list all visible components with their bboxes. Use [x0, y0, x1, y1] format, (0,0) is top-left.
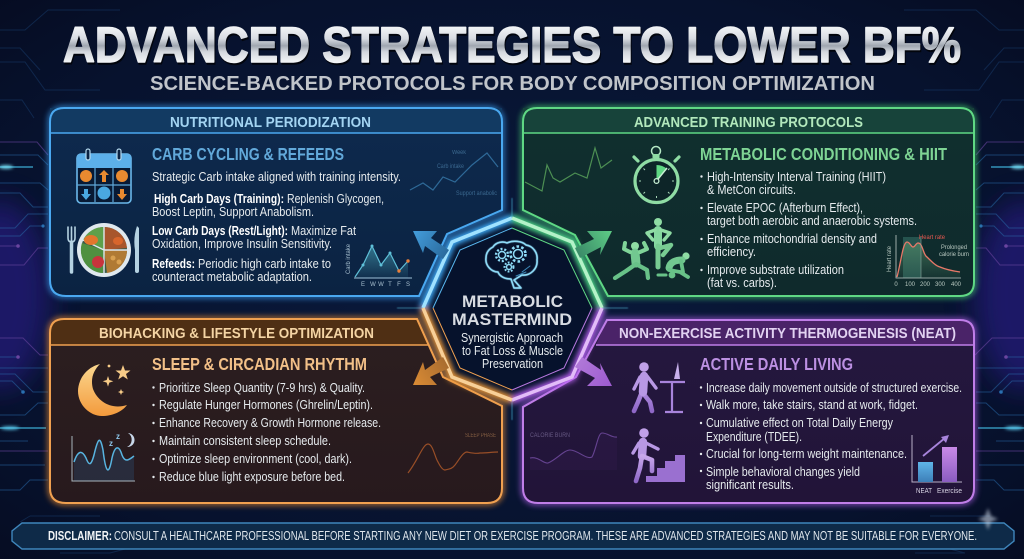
text block: Boost Leptin, Support Anabolism. [152, 205, 314, 219]
disclaimer bar: DISCLAIMER: [48, 529, 112, 543]
faint chart: carb intake trend [410, 150, 498, 197]
mini chart: weekly carb intake: Carb intake [346, 243, 352, 274]
bullet list: Walk more, take stairs, stand at work, fidget. [706, 398, 918, 412]
icon: person climbing stairs [633, 428, 685, 482]
panel: advanced training protocols [523, 108, 974, 296]
mini chart: heart rate afterburn: Heart rate [887, 245, 893, 272]
section heading: ADVANCED TRAINING PROTOCOLS [634, 114, 863, 131]
text block: High Carb Days (Training): [154, 192, 284, 206]
mini chart: heart rate afterburn [887, 235, 969, 288]
mini chart: heart rate afterburn: Prolonged [941, 245, 967, 251]
mini chart: heart rate afterburn: 0 [894, 282, 898, 288]
arrow: to NEAT panel [575, 357, 612, 386]
section heading: NUTRITIONAL PERIODIZATION [170, 114, 371, 131]
icon: sleep wave chart: z [116, 432, 120, 441]
faint chart: heart rate trace [525, 148, 612, 191]
hub title: METABOLIC [462, 293, 563, 311]
text block: Oxidation, Improve Insulin Sensitivity. [152, 237, 332, 251]
bullet list: Expenditure (TDEE). [706, 430, 802, 444]
bullet list: Regulate Hunger Hormones (Ghrelin/Leptin). [159, 398, 373, 412]
bullet list: Maintain consistent sleep schedule. [159, 434, 331, 448]
bullet list: High-Intensity Interval Training (HIIT) [707, 170, 886, 184]
subheading: ACTIVE DAILY LIVING [700, 354, 853, 374]
subheading: METABOLIC CONDITIONING & HIIT [700, 144, 947, 164]
hub description [461, 331, 563, 371]
hub description: to Fat Loss & Muscle [462, 344, 563, 358]
text block: Strategic Carb intake aligned with training intensity. [152, 170, 401, 184]
section heading: BIOHACKING & LIFESTYLE OPTIMIZATION [99, 325, 374, 342]
section heading: NON-EXERCISE ACTIVITY THERMOGENESIS (NEAT) [619, 325, 956, 342]
mini chart: weekly carb intake: S [406, 282, 410, 288]
sparkle [978, 508, 998, 530]
bullet list: Crucial for long-term weight maintenance. [706, 447, 907, 461]
text block: counteract metabolic adaptation. [152, 270, 312, 284]
faint chart: calorie burn [530, 433, 617, 470]
hub title: MASTERMIND [452, 311, 572, 329]
bar chart: NEAT vs exercise: NEAT [916, 488, 933, 495]
faint chart: sleep phase: SLEEP PHASE [465, 433, 496, 439]
hub description: Preservation [482, 357, 543, 371]
mini chart: weekly carb intake: F [397, 282, 401, 288]
icon: plate and cutlery [68, 223, 139, 277]
bullet list [700, 170, 917, 290]
hub description: Synergistic Approach [461, 331, 563, 345]
icon: brain with gears [486, 241, 537, 288]
bullet list: Reduce blue light exposure before bed. [159, 470, 345, 484]
text block [152, 170, 401, 284]
mini chart: weekly carb intake: T [388, 282, 392, 288]
icon: sleep wave chart [72, 432, 135, 481]
mini chart: heart rate afterburn: 300 [935, 282, 946, 288]
panel: biohacking and lifestyle [50, 319, 502, 503]
disclaimer bar [12, 523, 1014, 549]
mini chart: weekly carb intake: W [378, 282, 384, 288]
bullet list: & MetCon circuits. [707, 183, 796, 197]
panel: nutritional periodization [50, 108, 502, 296]
mini chart: weekly carb intake: E [361, 282, 365, 288]
mini chart: heart rate afterburn: calorie burn [939, 252, 969, 258]
mini chart: heart rate afterburn: 200 [920, 282, 931, 288]
bullet list: Optimize sleep environment (cool, dark). [159, 452, 352, 466]
text block: Replenish Glycogen, [287, 192, 384, 206]
bullet list: Enhance mitochondrial density and [707, 232, 877, 246]
faint chart: calorie burn: CALORIE BURN [530, 433, 570, 439]
bar chart: NEAT vs exercise [912, 435, 962, 495]
bullet list: Increase daily movement outside of structured exercise. [706, 381, 962, 395]
bullet list: significant results. [706, 478, 794, 492]
mini chart: heart rate afterburn: 100 [905, 282, 916, 288]
mini chart: weekly carb intake [346, 243, 412, 288]
text block: Low Carb Days (Rest/Light): [152, 224, 288, 238]
subtitle: SCIENCE-BACKED PROTOCOLS FOR BODY COMPOSITION OPTIMIZATION [150, 73, 875, 95]
bullet list: efficiency. [707, 245, 756, 259]
bullet list: (fat vs. carbs). [707, 276, 777, 290]
mini chart: heart rate afterburn: 400 [951, 282, 962, 288]
icon: sleep wave chart: z [109, 439, 113, 448]
panel: non-exercise activity thermogenesis [523, 320, 974, 503]
bullet list: Prioritize Sleep Quantity (7-9 hrs) & Quality. [159, 381, 365, 395]
bullet list: Cumulative effect on Total Daily Energy [706, 416, 894, 430]
central hub: metabolic mastermind [397, 198, 628, 420]
faint chart: sleep phase [408, 433, 498, 473]
bullet list: Simple behavioral changes yield [706, 465, 860, 479]
icon: walking person at standing desk [634, 362, 685, 412]
text block: Maximize Fat [291, 224, 356, 238]
bar chart: NEAT vs exercise: Exercise [937, 488, 962, 495]
text block: Refeeds: [152, 257, 195, 271]
bullet list [700, 381, 962, 492]
icon: crescent moon and stars [78, 364, 130, 416]
arrow: to training panel [575, 231, 612, 258]
bullet list: Elevate EPOC (Afterburn Effect), [707, 201, 863, 215]
hub title [452, 293, 572, 329]
mini chart: heart rate afterburn: Heart rate [919, 235, 946, 241]
faint chart: carb intake trend: Support anabolic [456, 191, 497, 197]
icon: calendar [77, 149, 131, 203]
arrow: to nutrition panel [413, 231, 449, 259]
bullet list: Improve substrate utilization [707, 263, 844, 277]
faint chart: carb intake trend: Week [452, 150, 467, 156]
icon: exercising figures [615, 218, 690, 278]
bullet list: Enhance Recovery & Growth Hormone release. [159, 416, 381, 430]
bullet list [152, 381, 381, 484]
subheading: SLEEP & CIRCADIAN RHYTHM [152, 354, 367, 374]
bullet list: target both aerobic and anaerobic systems. [707, 214, 917, 228]
text block: Periodic high carb intake to [198, 257, 331, 271]
arrow: to lifestyle panel [413, 357, 449, 385]
subheading: CARB CYCLING & REFEEDS [152, 144, 344, 164]
faint chart: carb intake trend: Carb intake [437, 164, 465, 170]
icon: stopwatch [634, 146, 679, 202]
mini chart: weekly carb intake: W [370, 282, 376, 288]
